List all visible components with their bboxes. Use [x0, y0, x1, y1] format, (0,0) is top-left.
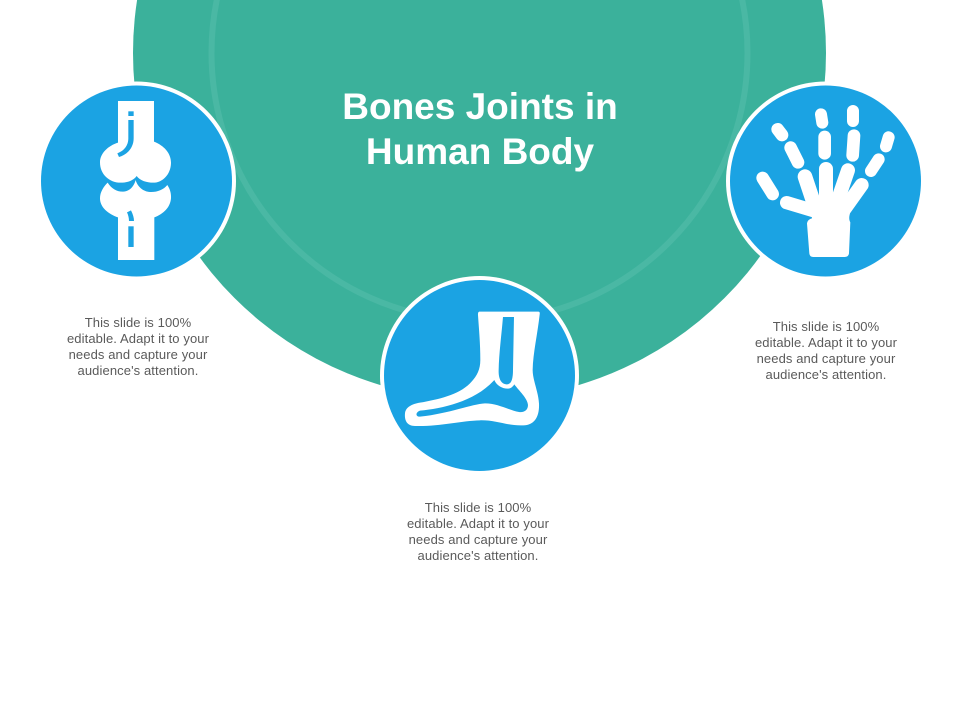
title: Bones Joints in: [342, 86, 618, 127]
title: [342, 86, 618, 172]
text block: right: needs and capture your: [757, 351, 895, 366]
text block: left: needs and capture your: [69, 347, 207, 362]
title: Human Body: [366, 131, 594, 172]
text block: center: needs and capture your: [409, 532, 547, 547]
text block: left: [67, 315, 209, 378]
text block: left: This slide is 100%: [85, 315, 191, 330]
large teal semicircle: [133, 0, 826, 400]
text block: left: editable. Adapt it to your: [67, 331, 209, 346]
text block: left: audience's attention.: [78, 363, 198, 378]
text block: right: audience's attention.: [766, 367, 886, 382]
icon: hand bones: [726, 82, 925, 280]
text block: right: [755, 319, 897, 382]
icon: knee joint: [37, 82, 236, 280]
text block: right: This slide is 100%: [773, 319, 879, 334]
text block: right: editable. Adapt it to your: [755, 335, 897, 350]
icon: foot bones: [380, 276, 579, 475]
text block: center: [407, 500, 549, 563]
text block: center: audience's attention.: [418, 548, 538, 563]
text block: center: editable. Adapt it to your: [407, 516, 549, 531]
text block: center: This slide is 100%: [425, 500, 531, 515]
